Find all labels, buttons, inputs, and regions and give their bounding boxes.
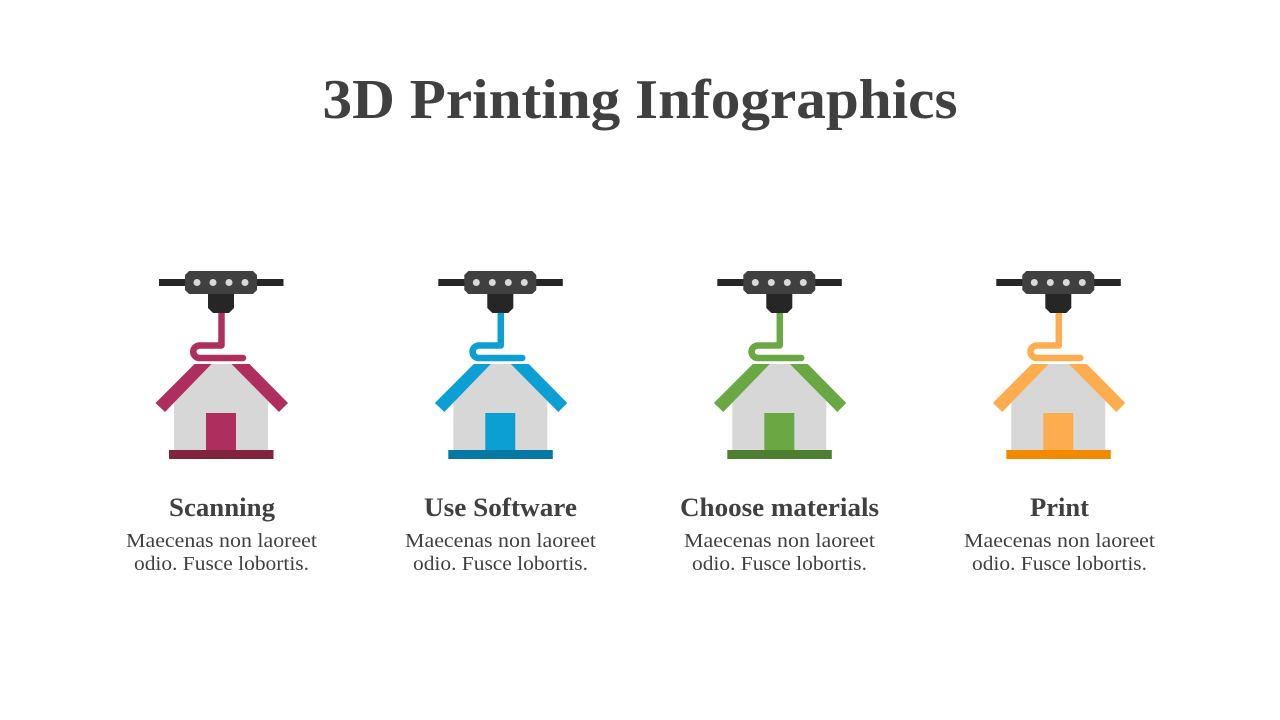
text block: use software description: odio. Fusce lobortis. [413,553,588,575]
icon: printer building house, blue [435,271,567,459]
text block: print description: Maecenas non laoreet [964,530,1155,552]
panel: scanning [126,271,317,575]
heading: Choose materials: Choose materials [680,493,879,522]
text block: choose materials description: Maecenas non laoreet [684,530,875,552]
text block: choose materials description: odio. Fusce lobortis. [692,553,867,575]
heading: Use Software: Use Software [424,493,577,522]
icon: printer building house, green [714,271,846,459]
panel: use software [405,271,596,575]
panel: print [964,271,1155,575]
panel: choose materials [680,271,879,575]
text block: print description: odio. Fusce lobortis. [972,553,1147,575]
title: 3D Printing Infographics [322,69,958,131]
heading: Scanning: Scanning [169,493,275,522]
icon: printer building house, orange [993,271,1125,459]
text block: scanning description: odio. Fusce lobortis. [134,553,309,575]
icon: printer building house, crimson [156,271,288,459]
text block: scanning description: Maecenas non laoreet [126,530,317,552]
text block: use software description: Maecenas non laoreet [405,530,596,552]
heading: Print: Print [1030,493,1089,522]
